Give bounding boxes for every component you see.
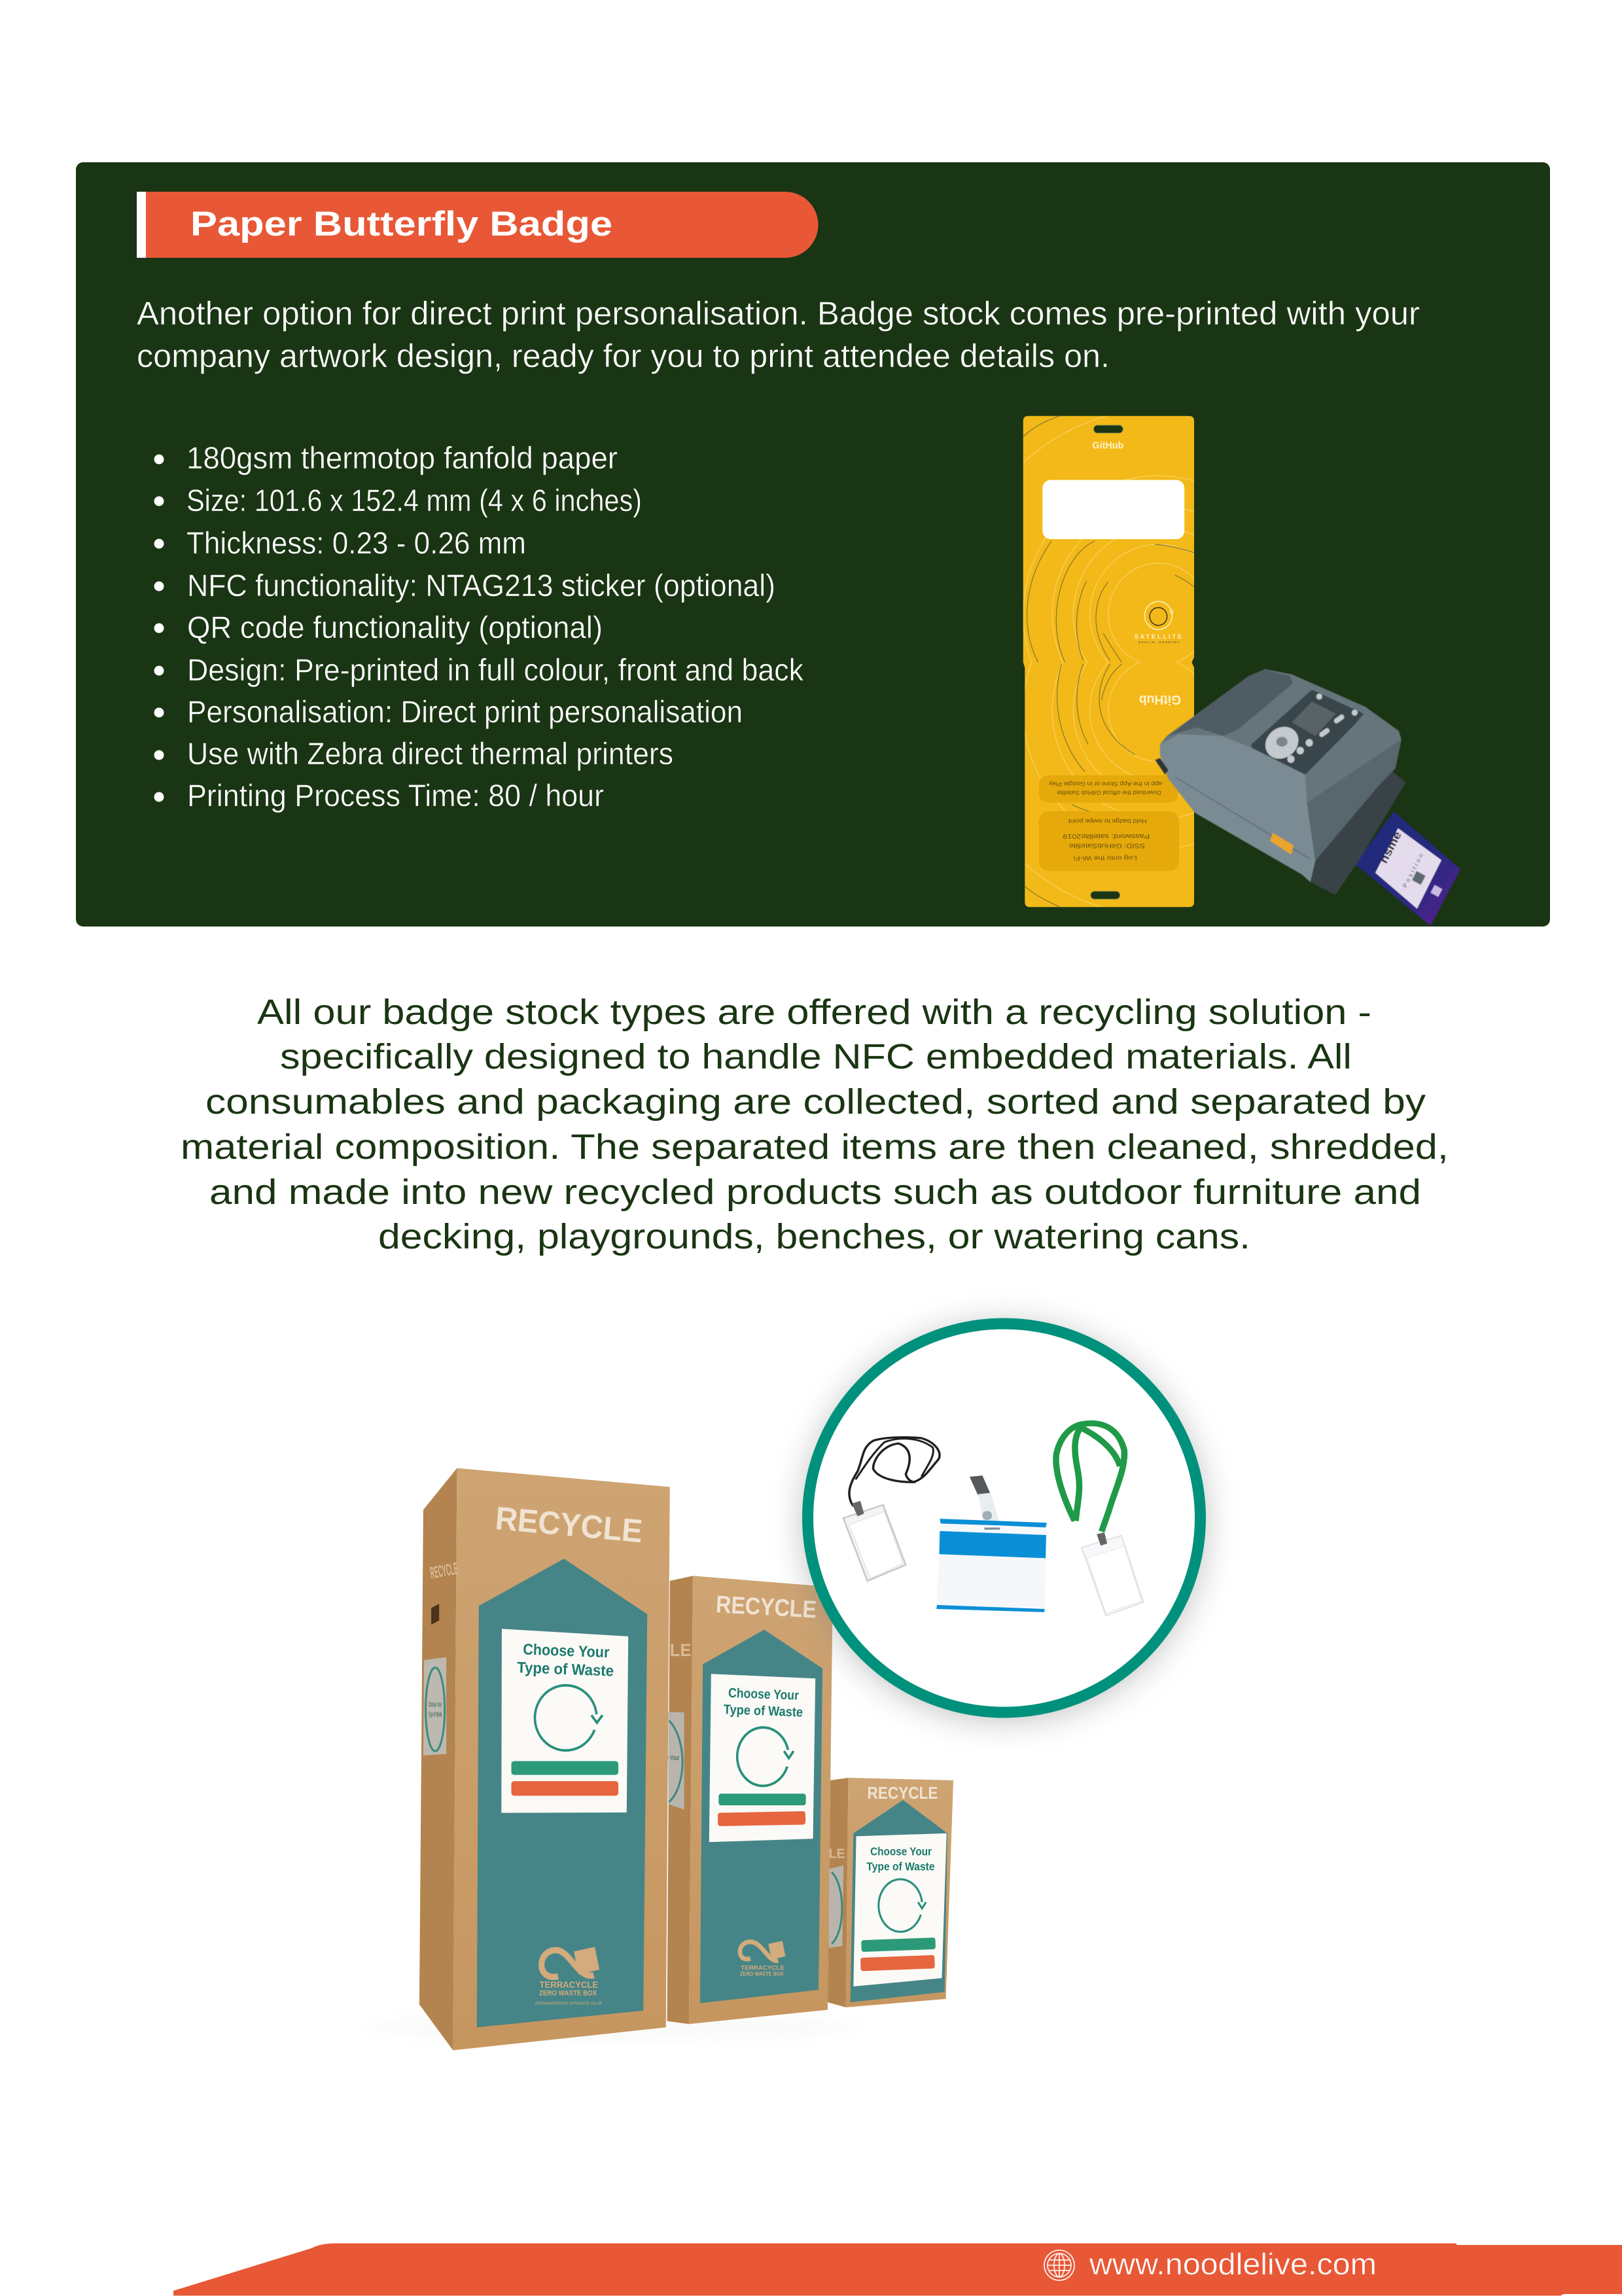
illustration: thermal label printer [1155,669,1460,926]
intro text [137,295,1420,374]
footer banner [173,2243,1622,2295]
printer front seam [1175,777,1311,859]
medium recycling box: RECYCLE [715,1590,817,1623]
printer front face [1160,734,1315,882]
logo: terracycle medium: ZERO WASTE BOX [740,1971,784,1977]
bullet list: specifications: Design: Pre-printed in full colour, front and back [187,652,803,687]
illustration: yellow fold-over badge [1023,416,1194,907]
inverted app download box [1039,775,1178,803]
panel: paper butterfly badge [76,162,1550,927]
body paragraph: recycling solution: specifically designed to handle NFC embedded materials. All [280,1037,1352,1076]
intro text: Another option for direct print personalisation. Badge stock comes pre-printed with your [137,295,1420,332]
brand name top: GitHub [1092,440,1124,451]
printed badge coming out: nsme [1377,829,1404,866]
heading: paper butterfly badge [137,192,818,258]
logo: terracycle large: ZERO WASTE BOX [539,1989,597,1997]
body paragraph: recycling solution: consumables and packaging are collected, sorted and separated by [205,1082,1426,1122]
inverted app download box: Download the official GitHub Satellite [1057,789,1161,796]
blue landscape badge holder with clip [936,1475,1047,1612]
printer screen [1292,701,1336,736]
medium recycling box [666,1576,833,2024]
small recycling box: Type of Waste [866,1860,935,1873]
intro text: company artwork design, ready for you to print attendee details on. [137,338,1110,374]
printer hinge [1155,758,1169,775]
inverted wifi details box [1039,811,1179,871]
printer buttons [1287,694,1358,763]
icon: top lanyard slot [1093,425,1123,433]
small recycling box: RECYCLE [868,1784,938,1803]
inverted wifi details box: Password: satellite2019 [1063,832,1150,839]
medium recycling box: Choose Your [728,1686,800,1703]
body paragraph: recycling solution: and made into new recycled products such as outdoor furniture and [209,1173,1421,1212]
blank name area [1042,480,1184,539]
printer lid [1169,670,1293,736]
icon: satellite logo: SATELLITE [1135,633,1184,640]
medium recycling box: Type of Waste [723,1703,803,1720]
inverted wifi details box: SSID: GitHubSatellite [1068,841,1145,849]
control panel [1251,690,1364,775]
printer body [1160,669,1402,882]
body paragraph: recycling solution: decking, playgrounds, benches, or watering cans. [378,1217,1250,1256]
small recycling box: Choose Your [870,1845,932,1858]
body paragraph: recycling solution: All our badge stock types are offered with a recycling solution - [257,993,1371,1032]
brand name inverted: GitHub [1139,692,1181,707]
heading: paper butterfly badge: Paper Butterfly Badge [190,205,612,243]
large recycling box: RECYCLE [429,1559,459,1583]
website url: www.noodlelive.com [1089,2247,1377,2281]
bullet list: specifications: Personalisation: Direct print personalisation [187,694,743,729]
floor shadow [368,2013,859,2042]
medium recycling box: LE [670,1640,691,1660]
large recycling box: RECYCLE [494,1500,644,1550]
recycling boxes group [368,1468,953,2051]
printer dial [1260,720,1305,766]
large recycling box: Choose Your [523,1640,610,1661]
logo: terracycle large: TERRACYCLE [539,1980,598,1990]
logo: terracycle large: zerowasteboxes.terracycle.co.uk [535,2001,602,2005]
logo: terracycle medium [740,1941,785,1977]
bullet list: specifications: Printing Process Time: 80 / hour [187,778,604,813]
printed badge coming out: Position [1402,853,1424,889]
medium recycling box: e Your [666,1754,680,1762]
large recycling box: Type of Waste [517,1659,614,1680]
printer side shading [1307,739,1402,861]
inverted wifi details box: Log onto the Wi-Fi [1074,855,1137,861]
icon: bottom lanyard slot [1091,891,1120,899]
body paragraph: recycling solution: material composition. The separated items are then cleaned, shredded, [181,1127,1449,1167]
large recycling box: Choose Your [429,1701,442,1709]
printed badge coming out [1355,811,1460,926]
inverted app download box: app in the App Store or in Google Play [1048,781,1163,787]
dark output tray [1311,770,1406,895]
green lanyard with holder [1056,1423,1143,1616]
inverted wifi details box: Hold badge to swipe point [1068,818,1147,824]
icon: globe [1044,2250,1074,2280]
bullet list: specifications: Size: 101.6 x 152.4 mm (4 x 6 inches) [186,483,642,518]
body paragraph: recycling solution [181,993,1449,1256]
bullet list: specifications: NFC functionality: NTAG213 sticker (optional) [187,568,775,603]
bullet list: specifications [154,440,803,813]
small recycling box: LE [829,1846,845,1862]
bullet list: specifications: Use with Zebra direct thermal printers [187,736,673,771]
large recycling box [419,1468,670,2051]
icon: satellite logo [1135,601,1184,644]
yellow release button [1270,833,1294,855]
logo: terracycle large [535,1947,602,2005]
logo: terracycle medium: TERRACYCLE [741,1964,785,1971]
callout circle: badge accessories [805,1324,1203,1718]
small recycling box [828,1778,953,2007]
bullet list: specifications: 180gsm thermotop fanfold paper [186,440,618,475]
icon: satellite logo: BERLIN, GERMANY [1138,641,1180,644]
bullet list: specifications: Thickness: 0.23 - 0.26 mm [186,525,526,560]
bullet list: specifications: QR code functionality (optional) [187,610,603,645]
large recycling box: Type of Waste [429,1710,442,1718]
black cord lanyard with holder [843,1438,940,1581]
